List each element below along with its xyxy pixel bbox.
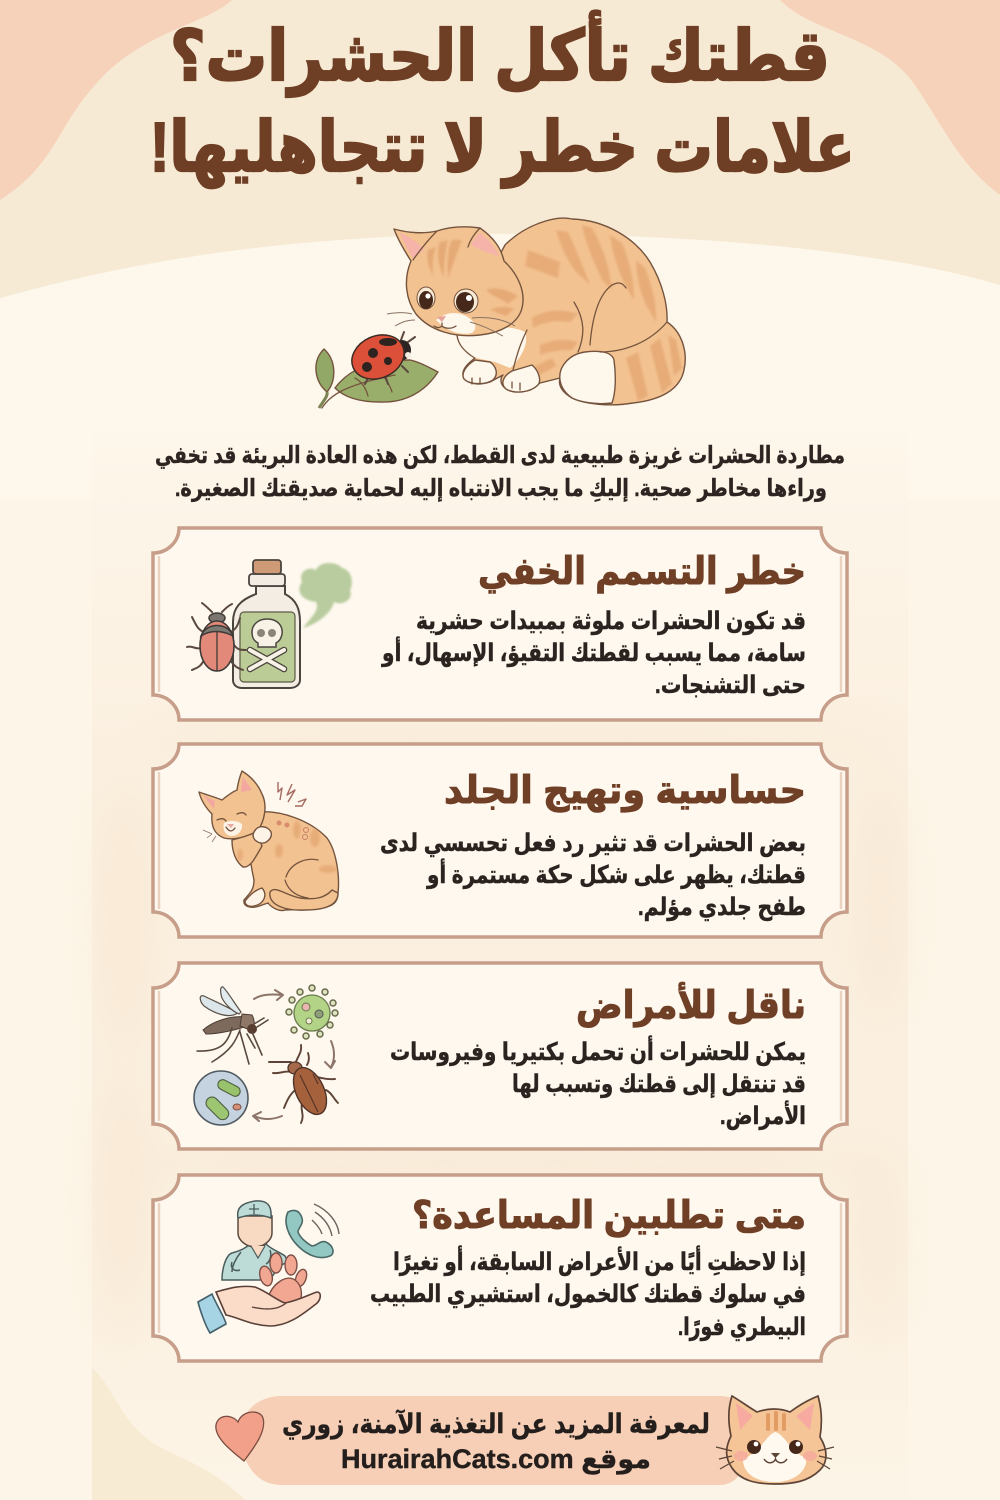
intro paragraph: مطاردة الحشرات غريزة طبيعية لدى القطط، لكن هذه العادة البريئة قد تخفي <box>155 442 845 469</box>
icon: poison bottle and beetle <box>187 560 352 688</box>
card body text: إذا لاحظتِ أيًا من الأعراض السابقة، أو تغيرًا <box>393 1245 806 1277</box>
card body text <box>380 830 806 922</box>
hero illustration: kitten looking at ladybug <box>316 218 685 408</box>
card body text <box>370 1245 806 1342</box>
vet <box>222 1201 288 1280</box>
card heading: حساسية وتهيج الجلد <box>444 770 806 813</box>
virus <box>286 985 338 1039</box>
arrow <box>325 1041 335 1068</box>
footer call to action <box>216 1396 834 1485</box>
title: علامات خطر لا تتجاهليها! <box>150 108 855 188</box>
card heading: متى تطلبين المساعدة؟ <box>412 1195 806 1237</box>
intro paragraph <box>155 442 845 503</box>
cockroach <box>269 1045 338 1123</box>
card heading: ناقل للأمراض <box>576 981 806 1027</box>
mosquito <box>197 987 268 1064</box>
card body text <box>390 1035 806 1130</box>
card body text: في سلوك قطتك كالخمول، استشيري الطبيب <box>370 1281 806 1309</box>
bacteria <box>194 1071 248 1125</box>
card body text: يمكن للحشرات أن تحمل بكتيريا وفيروسات <box>390 1035 806 1067</box>
card body text: طفح جلدي مؤلم. <box>638 894 806 922</box>
card body text: البيطري فورًا. <box>678 1314 806 1342</box>
card heading: خطر التسمم الخفي <box>478 551 806 594</box>
card body text: قد تكون الحشرات ملوثة بمبيدات حشرية <box>416 608 806 635</box>
icon: heart <box>216 1412 264 1461</box>
arrow <box>253 1112 282 1121</box>
card body text: سامة، مما يسبب لقطتك التقيؤ، الإسهال، أو <box>381 636 806 668</box>
footer text <box>282 1409 710 1475</box>
title <box>150 10 855 188</box>
panel: hidden poisoning <box>153 528 847 720</box>
intro paragraph: وراءها مخاطر صحية. إليكِ ما يجب الانتباه إليه لحماية صديقتك الصغيرة. <box>175 475 827 503</box>
footer pill <box>240 1396 752 1485</box>
icon: disease transmission cycle <box>194 985 338 1125</box>
ladybug on leaf <box>316 327 438 408</box>
card body text: قد تنتقل إلى قطتك وتسبب لها <box>512 1071 806 1099</box>
card body text: بعض الحشرات قد تثير رد فعل تحسسي لدى <box>380 830 806 857</box>
card body text: قطتك، يظهر على شكل حكة مستمرة أو <box>426 858 806 890</box>
card body text: الأمراض. <box>720 1100 806 1130</box>
panel: disease carrier <box>153 963 847 1149</box>
card frame <box>153 744 847 937</box>
icon: cat face <box>716 1396 834 1484</box>
icon: scratching cat <box>199 771 339 911</box>
card frame <box>153 528 847 720</box>
arrow <box>254 990 283 1000</box>
card body text: حتى التشنجات. <box>655 672 806 699</box>
panel: when to seek help <box>153 1175 847 1361</box>
card body text <box>381 608 806 699</box>
card frame <box>153 1175 847 1361</box>
footer text: لمعرفة المزيد عن التغذية الآمنة، زوري <box>282 1409 710 1440</box>
hand <box>198 1286 320 1333</box>
kitten <box>387 218 685 405</box>
panel: skin allergy <box>153 744 847 937</box>
title: قطتك تأكل الحشرات؟ <box>170 10 830 97</box>
card frame <box>153 963 847 1149</box>
paw <box>258 1253 309 1304</box>
phone <box>286 1204 339 1258</box>
footer text: موقع HurairahCats.com <box>341 1444 651 1475</box>
icon: vet, phone and caring hand <box>198 1201 339 1333</box>
